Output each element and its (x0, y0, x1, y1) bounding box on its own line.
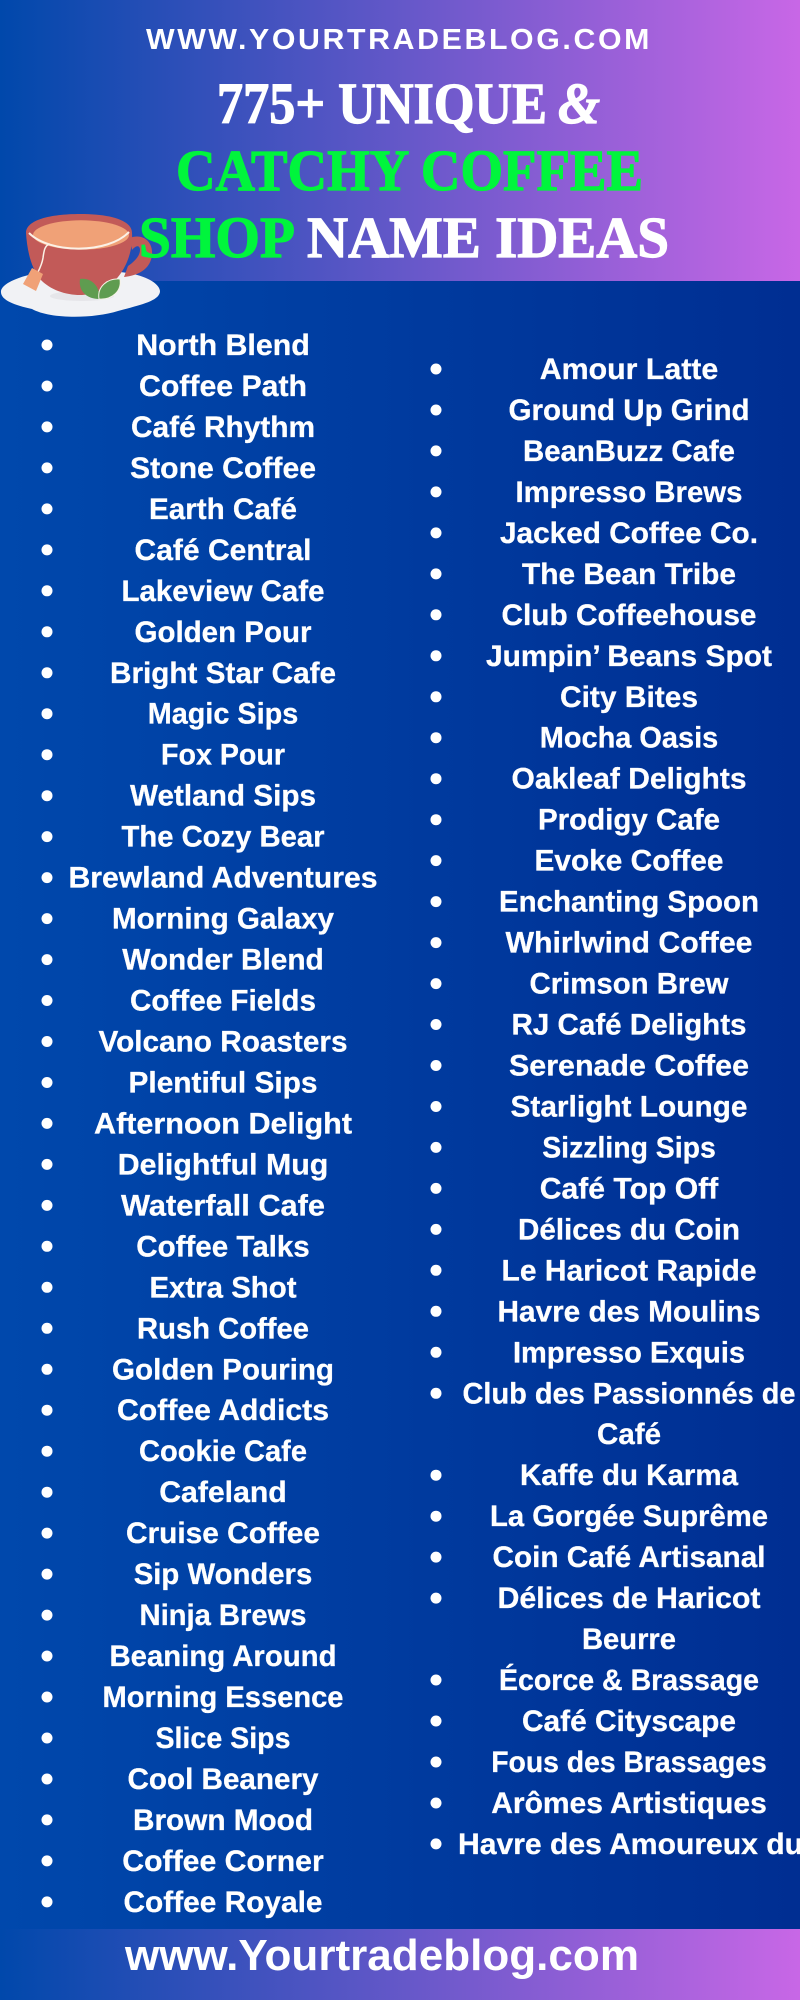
item (42, 452, 316, 485)
item: The Cozy Bear (122, 821, 325, 854)
item (42, 534, 312, 567)
item: Sizzling Sips (542, 1131, 716, 1164)
item: Ninja Brews (140, 1599, 306, 1632)
item: Cruise Coffee (126, 1517, 320, 1550)
header banner (0, 0, 800, 281)
item (42, 739, 285, 772)
item (430, 722, 718, 755)
item: Beaning Around (110, 1640, 336, 1673)
item: Fous des Brassages (491, 1746, 767, 1779)
item: Plentiful Sips (128, 1066, 318, 1100)
item (430, 968, 729, 1001)
item: Coin Café Artisanal (492, 1541, 766, 1574)
item: The Bean Tribe (522, 558, 736, 591)
item: Club des Passionnés de (462, 1377, 796, 1410)
item (42, 780, 316, 813)
item: Club Coffeehouse (502, 599, 756, 632)
item (42, 616, 312, 649)
footer website text: www.Yourtradeblog.com (124, 1931, 639, 1980)
item: Café Cityscape (522, 1705, 736, 1738)
item: Café Top Off (540, 1172, 719, 1205)
panel: right name list (430, 353, 800, 1861)
item (430, 804, 720, 837)
item: Coffee Addicts (117, 1394, 329, 1427)
item: Beurre (582, 1623, 676, 1656)
item: Café (597, 1418, 661, 1451)
item: Amour Latte (540, 353, 718, 386)
title line 2: CATCHY COFFEE (176, 138, 643, 203)
item: Coffee Path (139, 370, 307, 403)
title line 3 (139, 205, 669, 270)
item: Café Central (134, 534, 312, 567)
item: Le Haricot Rapide (502, 1254, 756, 1287)
item (430, 558, 736, 591)
item (42, 329, 310, 362)
item (430, 1582, 760, 1656)
item (42, 1271, 297, 1304)
item: Volcano Roasters (98, 1026, 348, 1058)
item (42, 493, 297, 526)
item (42, 1230, 310, 1263)
item: Jacked Coffee Co. (500, 517, 758, 550)
item: Serenade Coffee (509, 1050, 749, 1082)
item: Morning Essence (102, 1681, 344, 1714)
item: Whirlwind Coffee (506, 927, 752, 960)
item: Fox Pour (161, 739, 285, 772)
item: Rush Coffee (137, 1312, 309, 1345)
item: Oakleaf Delights (512, 763, 746, 796)
item (430, 1705, 736, 1738)
item: Morning Galaxy (112, 903, 334, 936)
item: Golden Pour (134, 616, 312, 649)
item (42, 1558, 312, 1591)
item: Golden Pouring (112, 1353, 334, 1386)
item (42, 1517, 320, 1550)
item (42, 411, 315, 444)
item (430, 435, 735, 468)
item: Kaffe du Karma (520, 1459, 738, 1492)
item: Brown Mood (133, 1804, 313, 1837)
item: Coffee Talks (136, 1230, 310, 1263)
item: Impresso Exquis (513, 1336, 745, 1369)
item: Earth Café (149, 493, 297, 526)
item: Evoke Coffee (534, 845, 724, 878)
item (42, 1476, 287, 1509)
item (430, 1131, 716, 1164)
item: Lakeview Cafe (122, 575, 324, 608)
item (42, 1804, 313, 1837)
item: Sip Wonders (134, 1558, 312, 1591)
item: Prodigy Cafe (538, 804, 720, 837)
item: North Blend (136, 329, 310, 362)
item: Afternoon Delight (94, 1107, 352, 1140)
icon: tea cup on saucer (1, 214, 160, 317)
item: Impresso Brews (516, 476, 742, 509)
title line 3: NAME IDEAS (307, 205, 669, 270)
item (42, 1066, 318, 1100)
item (42, 370, 307, 403)
title line 1: & (558, 71, 600, 136)
item (42, 984, 316, 1018)
title line 1: 775+ UNIQUE (217, 71, 547, 136)
website label top: WWW.YOURTRADEBLOG.COM (146, 24, 652, 56)
item: Écorce & Brassage (499, 1663, 759, 1697)
item: Brewland Adventures (68, 862, 378, 895)
item: La Gorgée Suprême (490, 1500, 768, 1533)
item: Jumpin’ Beans Spot (486, 640, 772, 673)
item (42, 1763, 319, 1796)
item: Havre des Moulins (498, 1295, 760, 1328)
item: Bright Star Cafe (110, 657, 336, 690)
item: Cafeland (159, 1476, 287, 1509)
item: Coffee Fields (130, 984, 316, 1018)
item (42, 698, 298, 731)
item (42, 1312, 309, 1345)
item: Coffee Corner (122, 1845, 324, 1878)
item: BeanBuzz Cafe (523, 435, 735, 468)
item: Havre des Amoureux du (458, 1828, 800, 1861)
item: Wetland Sips (130, 780, 316, 813)
panel: left name list (42, 329, 378, 1919)
item: City Bites (560, 681, 698, 714)
item: Délices de Haricot (498, 1582, 760, 1615)
item: Mocha Oasis (540, 722, 718, 755)
item: Ground Up Grind (508, 394, 750, 427)
title (139, 71, 669, 270)
item: Cool Beanery (128, 1763, 319, 1796)
item (430, 353, 718, 386)
item (430, 681, 698, 714)
title line 3: SHOP (139, 205, 295, 270)
item: Enchanting Spoon (499, 886, 759, 919)
item: Wonder Blend (122, 944, 324, 977)
footer banner (0, 1929, 800, 2000)
item: Arômes Artistiques (491, 1787, 767, 1820)
item (42, 1722, 290, 1755)
item: Starlight Lounge (510, 1090, 748, 1124)
item: Café Rhythm (131, 411, 315, 444)
item: RJ Café Delights (512, 1008, 746, 1042)
item (430, 1172, 719, 1205)
item: Slice Sips (156, 1722, 290, 1755)
item: Delightful Mug (118, 1148, 328, 1181)
item: Extra Shot (150, 1271, 297, 1304)
item: Cookie Cafe (139, 1435, 307, 1468)
item (430, 845, 724, 878)
item: Stone Coffee (130, 452, 316, 485)
item: Waterfall Cafe (121, 1189, 325, 1222)
item (42, 1599, 306, 1632)
item: Crimson Brew (530, 968, 729, 1001)
item: Magic Sips (148, 698, 298, 731)
item: Coffee Royale (124, 1886, 322, 1919)
item: Délices du Coin (518, 1213, 740, 1246)
item (42, 1435, 307, 1468)
item (430, 1377, 796, 1451)
